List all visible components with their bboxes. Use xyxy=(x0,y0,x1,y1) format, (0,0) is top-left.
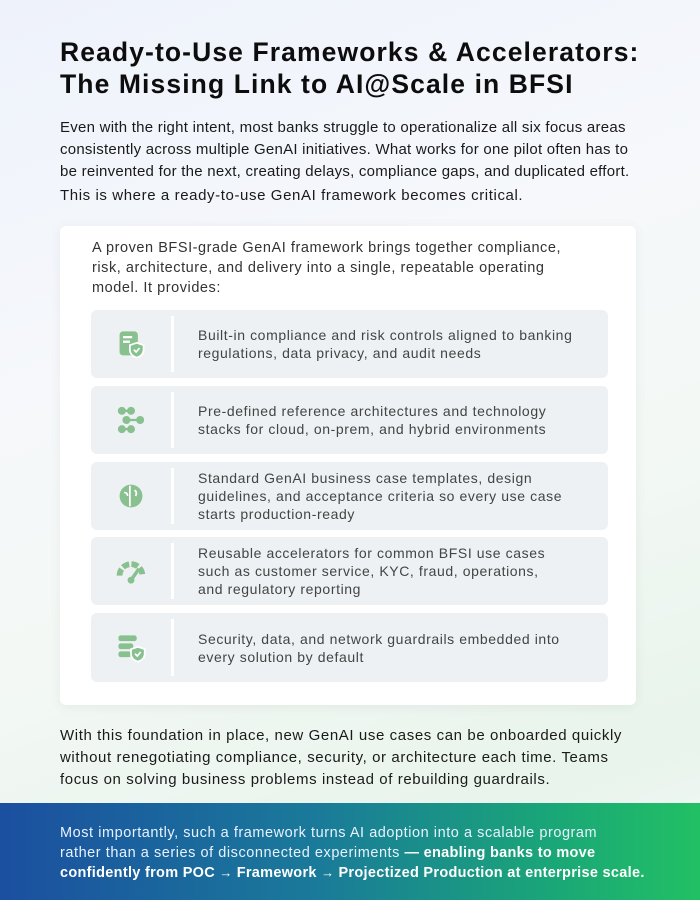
lead-in sentence: This is where a ready-to-use GenAI framework becomes critical. xyxy=(60,187,523,204)
row: templates: starts production-ready xyxy=(198,506,355,522)
intro paragraph: consistently across multiple GenAI initiatives. What works for one pilot often has to xyxy=(60,141,628,158)
icon: server shield xyxy=(118,635,146,662)
closing paragraph: With this foundation in place, new GenAI use cases can be onboarded quickly xyxy=(60,727,622,744)
title: The Missing Link to AI@Scale in BFSI xyxy=(60,69,574,99)
panel: framework card xyxy=(60,226,636,705)
closing paragraph: focus on solving business problems instead of rebuilding guardrails. xyxy=(60,771,550,788)
icon: document shield xyxy=(120,331,144,358)
row: accelerators: Reusable accelerators for common BFSI use cases xyxy=(198,545,545,561)
footer band: rather than a series of disconnected experiments — enabling banks to move xyxy=(60,845,595,861)
row: templates: Standard GenAI business case templates, design xyxy=(198,470,532,486)
intro paragraph: be reinvented for the next, creating delays, compliance gaps, and duplicated effort. xyxy=(60,163,629,180)
row: guardrails xyxy=(91,613,608,682)
row: architectures xyxy=(91,386,608,454)
title xyxy=(60,37,639,99)
row: guardrails: every solution by default xyxy=(198,648,364,664)
row: accelerators xyxy=(91,537,608,605)
row: templates xyxy=(91,462,608,530)
row: compliance: Built-in compliance and risk controls aligned to banking xyxy=(198,327,572,343)
footer band: Most importantly, such a framework turns AI adoption into a scalable program xyxy=(60,825,597,841)
title: Ready-to-Use Frameworks & Accelerators: xyxy=(60,37,639,67)
row: accelerators: and regulatory reporting xyxy=(198,581,361,597)
row: accelerators: such as customer service, KYC, fraud, operations, xyxy=(198,563,539,579)
icon: brain gear xyxy=(120,484,142,508)
row: compliance: regulations, data privacy, and audit needs xyxy=(198,345,481,361)
icon: nodes xyxy=(118,406,144,434)
row: architectures: Pre-defined reference architectures and technology xyxy=(198,403,546,419)
card intro text: model. It provides: xyxy=(92,280,221,296)
footer band: confidently from POC → Framework → Projectized Production at enterprise scale. xyxy=(60,865,645,881)
row: architectures: stacks for cloud, on-prem, and hybrid environments xyxy=(198,421,546,437)
closing paragraph: without renegotiating compliance, security, or architecture each time. Teams xyxy=(60,749,609,766)
card intro text: risk, architecture, and delivery into a single, repeatable operating xyxy=(92,260,544,276)
footer band xyxy=(0,803,700,900)
intro paragraph: Even with the right intent, most banks struggle to operationalize all six focus areas xyxy=(60,119,626,136)
card intro text: A proven BFSI-grade GenAI framework brings together compliance, xyxy=(92,240,561,256)
card intro text xyxy=(92,240,561,296)
intro paragraph xyxy=(60,119,629,180)
icon: gauge xyxy=(116,561,146,584)
row: compliance xyxy=(91,310,608,378)
row: guardrails: Security, data, and network guardrails embedded into xyxy=(198,630,560,646)
closing paragraph xyxy=(60,727,622,788)
row: templates: guidelines, and acceptance criteria so every use case xyxy=(198,488,562,504)
